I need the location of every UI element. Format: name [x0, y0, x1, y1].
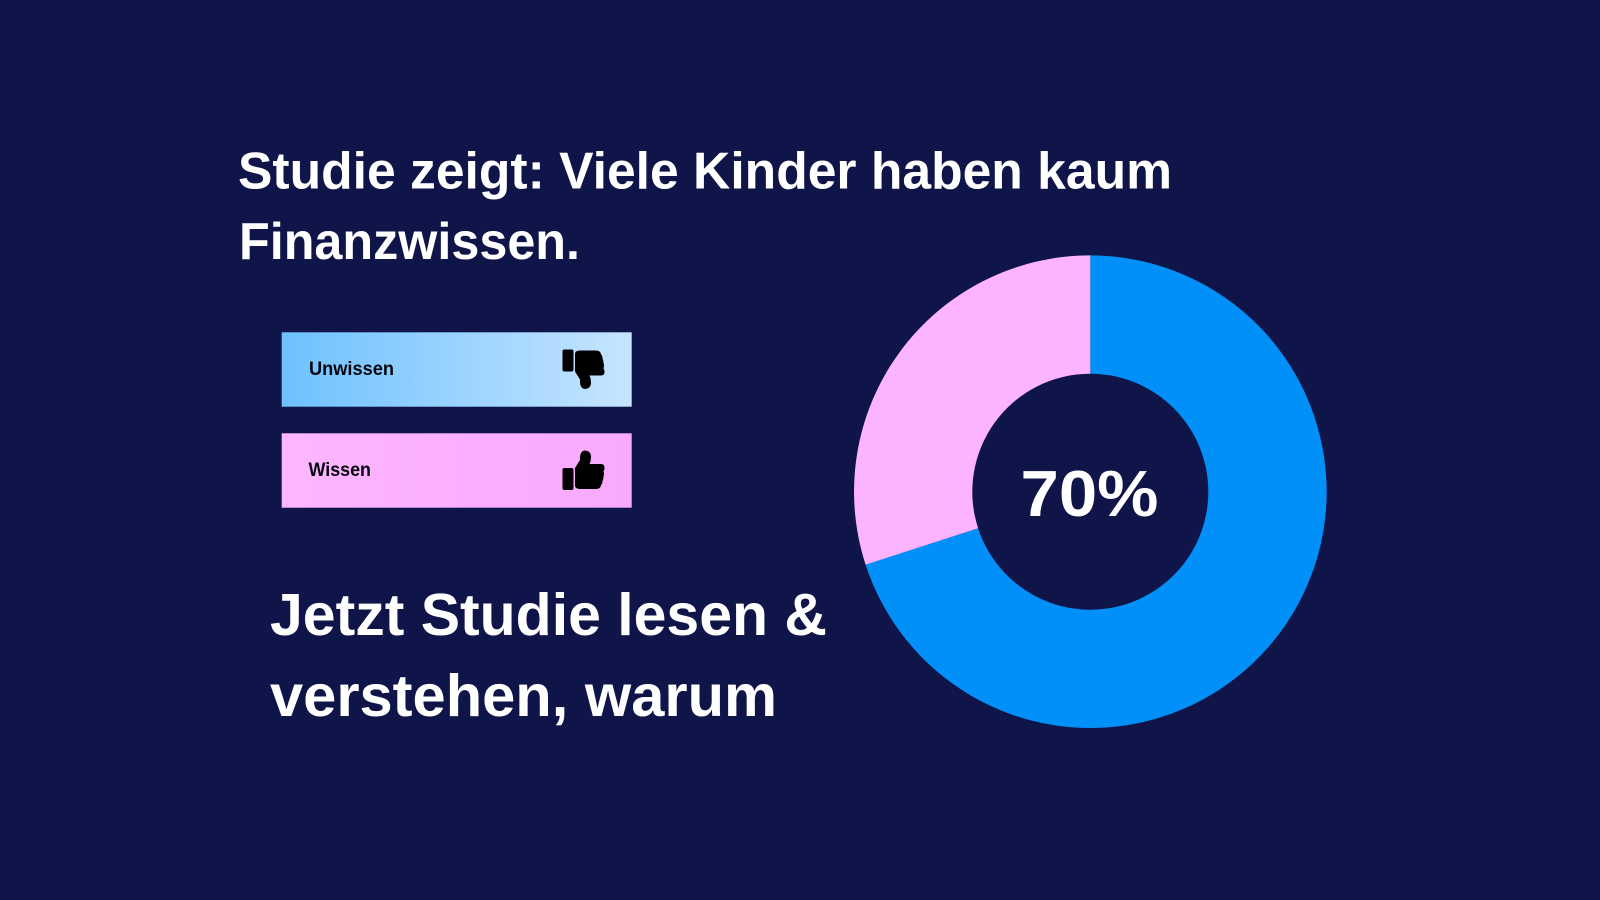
legend: Unwissen: Unwissen [309, 358, 394, 380]
title: Finanzwissen. [239, 213, 580, 271]
call to action text: Jetzt Studie lesen & [270, 582, 827, 648]
donut value: 70% [1020, 457, 1158, 530]
call to action text: verstehen, warum [270, 663, 777, 729]
call to action text [270, 582, 827, 729]
icon: thumbs down [562, 350, 604, 389]
icon: thumbs up [562, 450, 604, 490]
segment: 70% Unwissen [866, 255, 1327, 728]
title [238, 142, 1172, 271]
legend: Unwissen [282, 332, 632, 407]
legend: Wissen [282, 433, 632, 508]
title: Studie zeigt: Viele Kinder haben kaum [238, 142, 1172, 200]
donut chart [854, 255, 1327, 728]
legend: Wissen: Wissen [308, 459, 371, 481]
segment: 30% Wissen [854, 255, 1090, 565]
